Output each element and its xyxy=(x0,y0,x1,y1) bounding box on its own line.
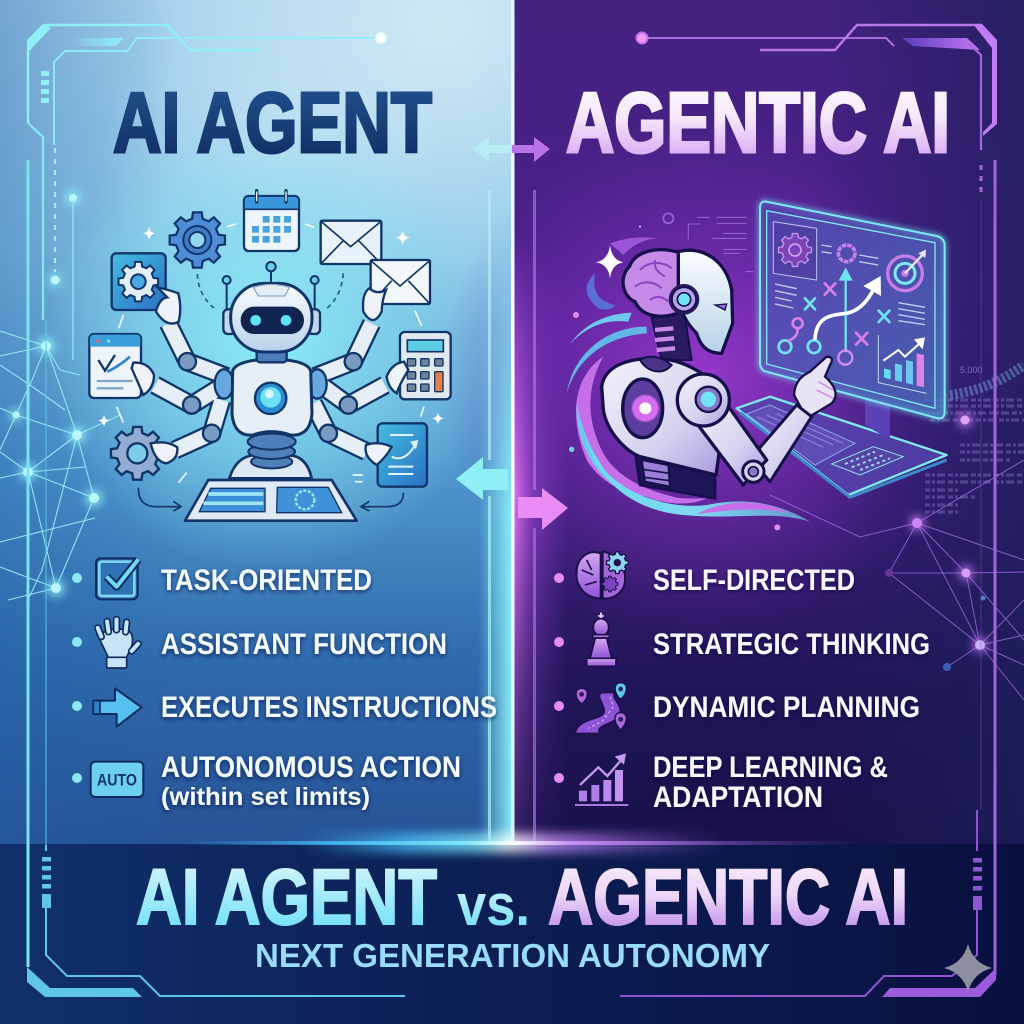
text: Task-Oriented: TASK-ORIENTED xyxy=(161,564,372,597)
screen: growth chart xyxy=(878,335,927,393)
robot elbows xyxy=(179,353,362,442)
robot neck xyxy=(652,307,692,360)
icon: auto badge: AUTO xyxy=(97,770,137,789)
robot waist xyxy=(635,452,715,498)
icon: right arrow xyxy=(93,688,142,727)
text: Strategic Thinking: STRATEGIC THINKING xyxy=(653,628,930,661)
icon: checkbox xyxy=(96,558,138,599)
frame: top left node xyxy=(376,32,386,44)
arrow: top right xyxy=(512,137,550,162)
screen: target xyxy=(888,249,926,291)
screen: plays xyxy=(779,276,889,353)
icon: envelope back xyxy=(321,221,381,264)
text: Deep Learning and: DEEP LEARNING & xyxy=(653,751,888,784)
centre divider xyxy=(480,0,562,841)
robot ear disc xyxy=(669,284,699,315)
subtitle: NEXT GENERATION AUTONOMY xyxy=(255,937,770,974)
background: left panel xyxy=(0,0,740,845)
code lines xyxy=(688,217,753,272)
arrow: top left xyxy=(473,137,512,162)
icons: right xyxy=(575,552,628,806)
watermark sparkle xyxy=(944,944,992,992)
robot face shell xyxy=(678,250,733,353)
robot hips and waist xyxy=(229,455,312,478)
network: left nodes xyxy=(0,331,120,600)
robot forearm xyxy=(751,405,812,482)
icon: envelope front xyxy=(371,260,430,304)
robot elbow xyxy=(743,461,764,482)
robot torso xyxy=(602,358,728,475)
text: Self-Directed: SELF-DIRECTED xyxy=(653,564,855,597)
icon: calculator xyxy=(400,332,451,399)
arrows beneath robot xyxy=(138,488,403,511)
flowing hair xyxy=(567,237,680,499)
illustration: humanoid strategist robot xyxy=(567,202,947,530)
illustration: multi-armed robot xyxy=(89,191,451,521)
data label: 5.000 xyxy=(960,365,983,375)
robot chest light xyxy=(255,383,286,414)
robot antennas xyxy=(223,262,319,312)
background: bottom title band xyxy=(0,844,1024,1024)
icon: gear lower left xyxy=(111,427,164,480)
icons: left xyxy=(91,558,143,797)
icon: growth chart xyxy=(575,753,628,806)
frame: left xyxy=(27,24,405,997)
robot hands xyxy=(132,287,408,465)
monitor stand xyxy=(865,397,890,440)
bottom title: AI Agent: AI AGENT xyxy=(136,852,437,941)
bottom title: Agentic AI: AGENTIC AI xyxy=(548,852,908,941)
icon: brain with gears xyxy=(576,552,628,599)
robot body xyxy=(132,262,408,478)
network: right nodes and data stream xyxy=(770,365,1024,700)
icon: refresh card xyxy=(378,423,427,487)
screen: gear brain panel xyxy=(773,222,817,280)
bottom title: vs: vs. xyxy=(457,873,530,938)
text: Dynamic Planning: DYNAMIC PLANNING xyxy=(653,691,920,724)
bottom title xyxy=(136,852,908,941)
monitor xyxy=(760,202,945,418)
icon: calendar xyxy=(244,191,299,251)
icon: gear card xyxy=(112,253,166,310)
text: Adaptation: ADAPTATION xyxy=(653,781,823,814)
icon: chess bishop xyxy=(587,613,616,666)
monitor glow xyxy=(760,202,945,418)
text: Assistant Function: ASSISTANT FUNCTION xyxy=(161,628,447,661)
robot torso xyxy=(232,359,312,435)
icon: robot hand xyxy=(94,617,142,668)
list: AI Agent features xyxy=(72,558,497,811)
robot visor xyxy=(241,307,304,334)
keyboard base xyxy=(737,397,947,497)
bullets: left xyxy=(72,573,82,783)
robot ears xyxy=(223,309,320,334)
background: right panel xyxy=(440,0,1024,845)
sparkles and dashes xyxy=(98,224,444,483)
robot eye xyxy=(715,304,727,310)
robot upper arm xyxy=(692,402,767,485)
robot hand xyxy=(794,357,836,418)
icon: checklist window xyxy=(89,334,141,398)
bullets: right xyxy=(554,573,564,783)
title: AI Agent: AI AGENT xyxy=(113,76,432,171)
screen: ring and up arrow xyxy=(838,245,855,365)
arrow: bottom right xyxy=(518,488,568,530)
list: Agentic AI features xyxy=(554,552,930,814)
robot shoulders xyxy=(215,369,327,399)
robot collar xyxy=(640,357,672,371)
robot chest core xyxy=(623,379,663,438)
robot neck xyxy=(257,348,287,362)
text: Autonomous Action: AUTONOMOUS ACTION xyxy=(161,751,461,784)
robot back brain xyxy=(623,250,682,316)
sparkle and dots xyxy=(569,213,780,530)
robot head xyxy=(231,283,312,352)
text: within set limits: (within set limits) xyxy=(161,783,370,811)
robot arms xyxy=(155,323,385,452)
front flow ribbons xyxy=(583,427,810,522)
glow line above bottom band xyxy=(180,833,860,853)
icon: gear top xyxy=(170,212,225,268)
frame: top right node xyxy=(636,32,648,44)
arrow: bottom left xyxy=(456,457,508,500)
icon: winding road and pins xyxy=(575,683,626,733)
robot shoulder xyxy=(677,374,729,426)
text: Executes Instructions: EXECUTES INSTRUCTIONS xyxy=(161,691,497,724)
network: left glowing nodes xyxy=(10,191,102,596)
screen: text lines xyxy=(775,245,925,325)
icon: auto badge xyxy=(91,762,143,797)
tablet base xyxy=(185,480,357,521)
frame: right xyxy=(620,24,997,997)
